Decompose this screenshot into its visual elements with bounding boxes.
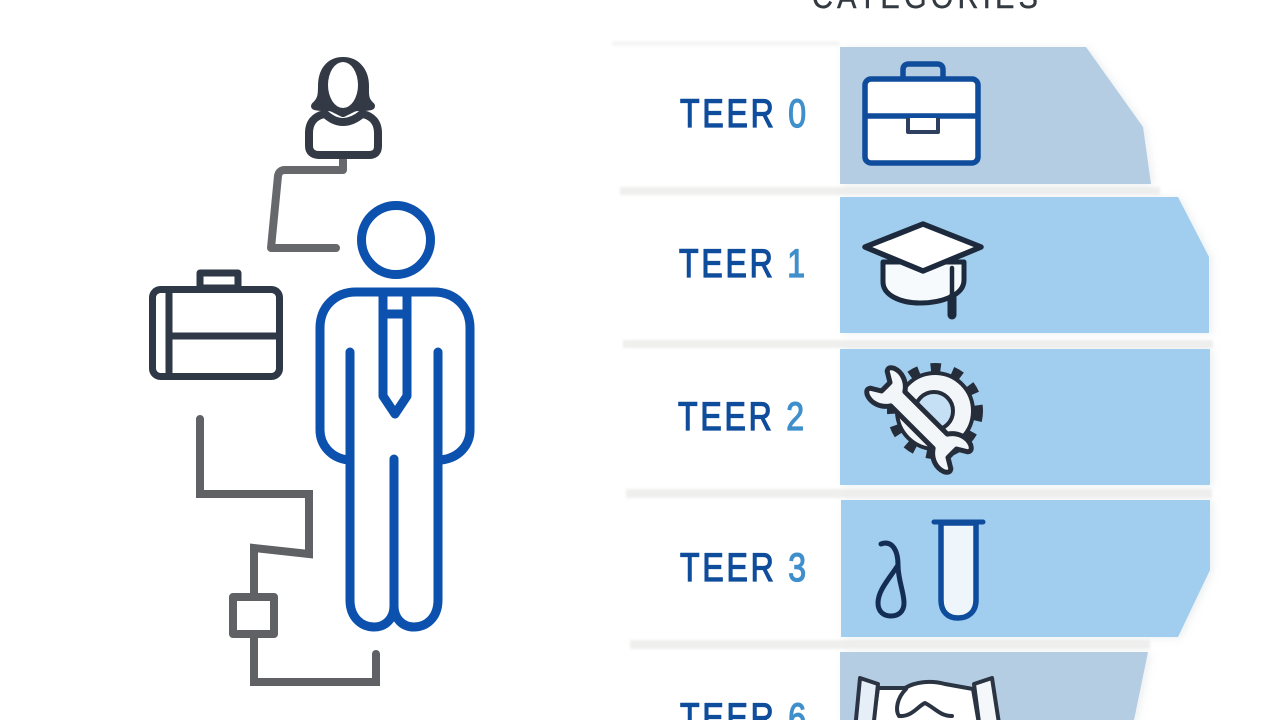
panel: TEER 3	[680, 500, 1210, 637]
icon: test tube	[934, 522, 983, 618]
panel background 6	[840, 652, 1148, 720]
icon: woman	[309, 61, 378, 155]
icon: man in suit	[320, 206, 470, 627]
panel: TEER 0	[680, 47, 1151, 184]
panel background 3	[841, 500, 1210, 637]
label: TEER 2: TEER 2	[678, 394, 807, 439]
label: TEER 0: TEER 0	[680, 91, 809, 136]
label: TEER 1: TEER 1	[679, 241, 808, 286]
connector: woman to man	[271, 160, 343, 248]
icon: handshake	[855, 678, 1000, 720]
row separators	[612, 41, 1213, 649]
label: TEER 3: TEER 3	[680, 545, 809, 590]
panel background 0	[840, 47, 1151, 184]
panel: TEER 2	[678, 349, 1210, 485]
icon: graduation cap	[865, 224, 981, 315]
panel: TEER 1	[679, 197, 1209, 333]
panel background 2	[840, 349, 1210, 485]
connector: briefcase to box and down	[200, 419, 376, 682]
icon: blue briefcase	[865, 64, 978, 163]
panel: TEER 6	[680, 652, 1148, 720]
icon: drop	[878, 543, 904, 616]
panel background 1	[840, 197, 1209, 333]
icon: dark briefcase	[152, 273, 280, 376]
icon: wrench and gear	[864, 365, 978, 475]
